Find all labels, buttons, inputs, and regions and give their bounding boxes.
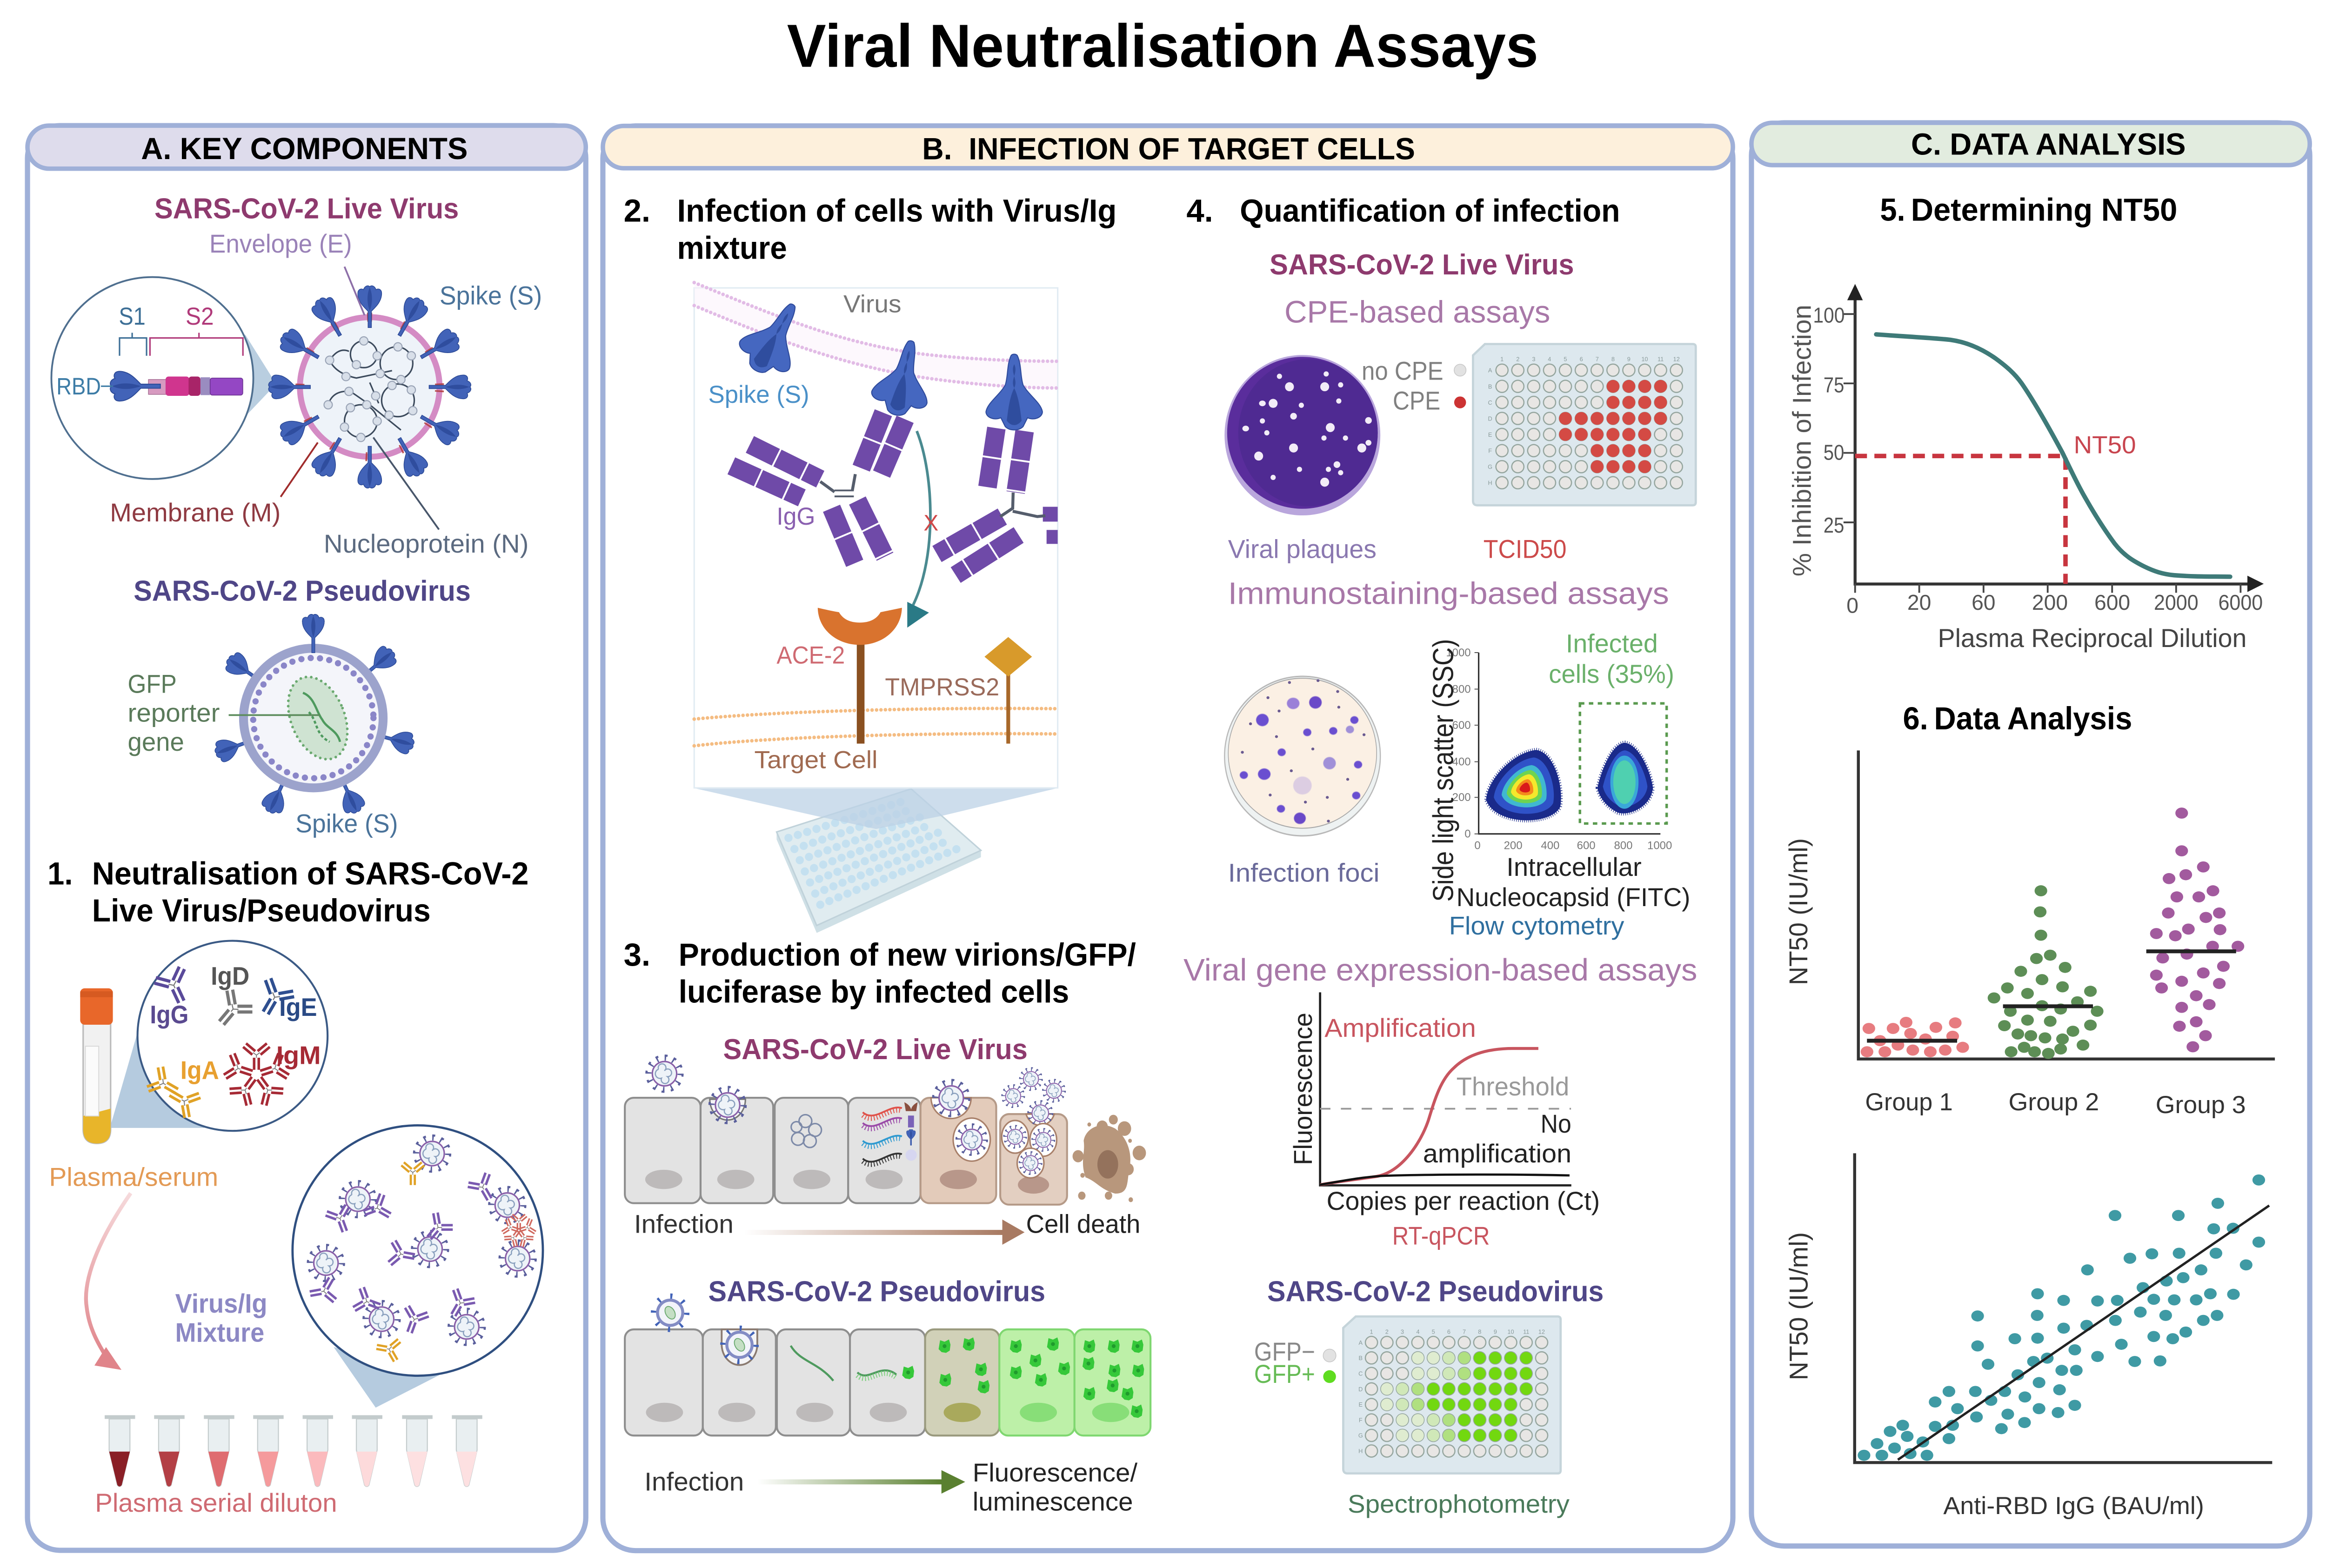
chart: neutralisation curve: 0 bbox=[1846, 593, 1858, 617]
diagram: live virus structure bbox=[51, 267, 471, 529]
TMPRSS2 bbox=[984, 637, 1032, 744]
icon: TCID50 plate: 10 bbox=[1641, 356, 1648, 363]
icon: TCID50 plate: 7 bbox=[1596, 356, 1599, 363]
chart: RT-qPCR amplification: No bbox=[1541, 1109, 1571, 1138]
chart: flow cytometry: 600 bbox=[1577, 839, 1596, 852]
heading: step 6: Data Analysis bbox=[1934, 701, 2132, 736]
arrow: infection to cell death bbox=[744, 1220, 1024, 1245]
callout cone bbox=[694, 788, 1057, 829]
chart: flow cytometry: 800 bbox=[1614, 839, 1632, 852]
label: GFP reporter gene: reporter bbox=[128, 698, 220, 727]
icon: TCID50 plate: B bbox=[1488, 383, 1492, 390]
icon: GFP plate: G bbox=[1358, 1432, 1363, 1439]
heading: step 2: 2. bbox=[624, 193, 650, 229]
panel C: data analysis bbox=[1751, 123, 2310, 1546]
icon: TCID50 plate: H bbox=[1488, 480, 1492, 487]
heading: step 5: 5. bbox=[1880, 192, 1905, 228]
cell membrane bbox=[694, 708, 1057, 746]
icon: TCID50 plate: E bbox=[1488, 431, 1492, 438]
dots: group 2 bbox=[1988, 885, 2104, 1059]
label: TCID50: TCID50 bbox=[1484, 534, 1567, 564]
uncoated RNA bbox=[791, 1114, 822, 1148]
panel B header bbox=[603, 126, 1733, 168]
icon: TCID50 plate: 3 bbox=[1532, 356, 1536, 363]
chart: NT50 vs anti-RBD IgG scatter: Anti-RBD IgG (BAU/ml) bbox=[1943, 1492, 2204, 1520]
virions entering bbox=[646, 1055, 682, 1092]
legend: GFP: GFP− bbox=[1254, 1337, 1315, 1366]
chart: flow cytometry: 200 bbox=[1504, 839, 1523, 852]
heading: step 1: Neutralisation of SARS-CoV-2 bbox=[92, 855, 528, 891]
label: viral plaques: Viral plaques bbox=[1228, 534, 1377, 564]
chart: neutralisation curve bbox=[1787, 284, 2264, 653]
chart: NT50 by group bbox=[1784, 750, 2275, 1119]
cell row: pseudovirus infection bbox=[625, 1296, 1150, 1435]
chart: flow cytometry bbox=[1427, 628, 1690, 912]
panel B header: B. INFECTION OF TARGET CELLS bbox=[922, 132, 1415, 166]
icon: GFP plate: 5 bbox=[1432, 1328, 1435, 1335]
virus membrane bbox=[694, 282, 1057, 388]
diagram: spike/antibody/ACE-2 interaction: IgG bbox=[776, 503, 815, 530]
label: spectrophotometry: Spectrophotometry bbox=[1348, 1490, 1570, 1518]
diagram: live virus structure: RBD bbox=[56, 373, 101, 400]
chart: RT-qPCR amplification bbox=[1288, 992, 1600, 1215]
heading: step 4: 4. bbox=[1186, 193, 1213, 229]
panel C header bbox=[1751, 123, 2310, 165]
heading: step 2: Infection of cells with Virus/Ig bbox=[677, 193, 1116, 229]
chart: flow cytometry: 600 bbox=[1452, 719, 1471, 732]
callout: plasma tube to immunoglobulins: IgD bbox=[211, 962, 249, 990]
icon: 96-well plate under zoom bbox=[776, 789, 981, 933]
label: membrane: Membrane (M) bbox=[110, 498, 281, 527]
heading: step 3: luciferase by infected cells bbox=[679, 974, 1069, 1010]
diagram: spike/antibody/ACE-2 interaction: TMPRSS2 bbox=[885, 674, 999, 701]
heading: step 4: Quantification of infection bbox=[1240, 193, 1620, 229]
icon: TCID50 plate: 8 bbox=[1611, 356, 1615, 363]
chart: neutralisation curve: 20 bbox=[1907, 590, 1931, 614]
icon: GFP plate: 10 bbox=[1507, 1328, 1514, 1335]
viral RNA and proteins bbox=[863, 1108, 902, 1165]
panel B: infection of target cells bbox=[603, 126, 1733, 1551]
chart: neutralisation curve: 50 bbox=[1824, 440, 1844, 465]
heading: step 6: 6. bbox=[1903, 701, 1928, 736]
chart: RT-qPCR amplification: Amplification bbox=[1324, 1013, 1476, 1042]
label: nucleoprotein: Nucleoprotein (N) bbox=[324, 529, 528, 558]
heading: pseudovirus (step 4): SARS-CoV-2 Pseudovirus bbox=[1267, 1275, 1604, 1308]
antibody 1 bbox=[731, 412, 906, 565]
dots: group 1 bbox=[1861, 1017, 1969, 1057]
label: fluorescence/luminescence: Fluorescence/ bbox=[973, 1458, 1138, 1487]
icon: TCID50 plate: D bbox=[1488, 415, 1492, 422]
chart: neutralisation curve: 600 bbox=[2094, 590, 2130, 614]
diagram: spike/antibody/ACE-2 interaction: Spike (S) bbox=[708, 381, 809, 408]
label: virus/Ig mixture: Virus/Ig bbox=[175, 1289, 267, 1319]
chart: NT50 vs anti-RBD IgG scatter: NT50 (IU/ml) bbox=[1784, 1232, 1813, 1381]
icon: TCID50 plate: A bbox=[1488, 367, 1492, 374]
chart: neutralisation curve: 100 bbox=[1813, 303, 1845, 327]
title: Viral Neutralisation Assays bbox=[787, 12, 1538, 80]
diagram: spike/antibody/ACE-2 interaction bbox=[694, 282, 1058, 788]
icon: TCID50 plate: 2 bbox=[1516, 356, 1519, 363]
callout: virus/Ig mixture bbox=[293, 1125, 543, 1408]
chart: RT-qPCR amplification: amplification bbox=[1423, 1139, 1571, 1168]
icon: TCID50 plate: 6 bbox=[1580, 356, 1583, 363]
chart: neutralisation curve: Plasma Reciprocal Dilution bbox=[1938, 623, 2246, 653]
icon: TCID50 plate: 4 bbox=[1548, 356, 1551, 363]
arrow: infection to fluorescence bbox=[757, 1470, 965, 1494]
heading: step 3: Production of new virions/GFP/ bbox=[679, 937, 1136, 973]
callout: plasma tube to immunoglobulins bbox=[80, 941, 328, 1143]
chart: flow cytometry: Intracellular bbox=[1506, 852, 1642, 881]
chart: neutralisation curve: 60 bbox=[1972, 590, 1996, 614]
label: GFP reporter gene: gene bbox=[128, 727, 184, 756]
icon: pseudovirus bbox=[212, 614, 416, 817]
label: infection (pseudovirus): Infection bbox=[644, 1467, 744, 1496]
icon: GFP plate: 8 bbox=[1478, 1328, 1481, 1335]
heading: live virus (step 3): SARS-CoV-2 Live Virus bbox=[723, 1034, 1028, 1066]
icon: infection foci dish bbox=[1224, 676, 1380, 836]
callout: plasma tube to immunoglobulins: IgM bbox=[276, 1042, 321, 1070]
icon: GFP plate: C bbox=[1358, 1370, 1363, 1377]
legend: CPE: no CPE bbox=[1362, 356, 1444, 386]
legend: CPE: CPE bbox=[1393, 386, 1440, 415]
legend: GFP: GFP+ bbox=[1254, 1359, 1315, 1388]
icon: SARS-CoV-2 virion bbox=[268, 286, 471, 488]
heading: step 1: 1. bbox=[47, 855, 73, 891]
icon: TCID50 plate: 12 bbox=[1673, 356, 1680, 363]
label: virus/Ig mixture: Mixture bbox=[175, 1318, 264, 1348]
label: pseudovirus spike: Spike (S) bbox=[295, 809, 398, 838]
icon: TCID50 plate: 1 bbox=[1500, 356, 1504, 363]
chart: RT-qPCR amplification: Copies per reaction (Ct) bbox=[1327, 1186, 1600, 1215]
chart: neutralisation curve: 200 bbox=[2032, 590, 2068, 614]
arrow: blocked entry bbox=[907, 431, 938, 627]
antibody 2 bbox=[937, 428, 1024, 575]
heading: step 3 bbox=[624, 937, 1136, 1010]
cell row: live virus infection bbox=[625, 1055, 1146, 1205]
heading: step 2 bbox=[624, 193, 1116, 266]
chart: neutralisation curve: 2000 bbox=[2154, 590, 2199, 614]
legend: GFP bbox=[1254, 1337, 1336, 1388]
chart: neutralisation curve: 6000 bbox=[2218, 590, 2263, 614]
diagram: spike/antibody/ACE-2 interaction: Virus bbox=[843, 290, 902, 318]
label: infection foci: Infection foci bbox=[1228, 858, 1379, 887]
icon: TCID50 plate bbox=[1473, 344, 1696, 505]
chart: neutralisation curve: 75 bbox=[1824, 373, 1844, 397]
icon: TCID50 plate: 5 bbox=[1564, 356, 1567, 363]
panel A: key components bbox=[27, 126, 586, 1550]
panel A header bbox=[27, 126, 586, 169]
chart: flow cytometry: 200 bbox=[1452, 791, 1471, 804]
chart: NT50 by group: NT50 (IU/ml) bbox=[1784, 838, 1813, 985]
scatter points bbox=[1858, 1174, 2265, 1461]
chart: RT-qPCR amplification: Threshold bbox=[1457, 1072, 1569, 1101]
chart: flow cytometry: Infected bbox=[1566, 628, 1658, 658]
spikes bbox=[731, 291, 818, 384]
icon: serial dilution tubes bbox=[105, 1415, 482, 1487]
callout: plasma tube to immunoglobulins: IgE bbox=[279, 994, 317, 1021]
bracket S1 bbox=[120, 333, 147, 356]
heading: CPE-based assays: CPE-based assays bbox=[1284, 295, 1550, 330]
budding and vesicle virions bbox=[931, 1098, 971, 1119]
chart: flow cytometry: 400 bbox=[1452, 756, 1471, 768]
chart: NT50 by group: Group 3 bbox=[2156, 1091, 2246, 1119]
dots: group 3 bbox=[2150, 807, 2244, 1052]
label: flow cytometry: Flow cytometry bbox=[1449, 912, 1624, 940]
icon: GFP plate: 7 bbox=[1463, 1328, 1466, 1335]
label: cell death: Cell death bbox=[1026, 1209, 1140, 1239]
chart: flow cytometry: 1000 bbox=[1647, 839, 1672, 852]
ACE-2 receptor bbox=[818, 608, 902, 744]
heading: live virus: SARS-CoV-2 Live Virus bbox=[154, 193, 459, 225]
arrow: blocked entry: X bbox=[923, 511, 938, 536]
label: virus/Ig mixture bbox=[175, 1289, 267, 1348]
heading: step 5: Determining NT50 bbox=[1911, 192, 2177, 228]
reporter RNA strands bbox=[791, 1346, 896, 1381]
arrow: plasma to tubes bbox=[86, 1193, 131, 1370]
heading: pseudovirus (step 3): SARS-CoV-2 Pseudovirus bbox=[708, 1275, 1045, 1308]
chart: neutralisation curve: % Inhibition of Infection bbox=[1787, 305, 1817, 576]
GFP proteins bbox=[902, 1337, 1144, 1418]
icon: TCID50 plate: G bbox=[1488, 463, 1492, 470]
bracket S2 bbox=[150, 333, 243, 356]
chart: RT-qPCR amplification: Fluorescence bbox=[1288, 1013, 1317, 1165]
heading: step 1: Live Virus/Pseudovirus bbox=[92, 893, 431, 928]
chart: flow cytometry: 1000 bbox=[1446, 647, 1471, 659]
chart: flow cytometry: Side light scatter (SSC) bbox=[1427, 639, 1459, 902]
icon: GFP plate: H bbox=[1358, 1448, 1363, 1455]
icon: GFP plate: 4 bbox=[1416, 1328, 1420, 1335]
diagram: spike/antibody/ACE-2 interaction: Target Cell bbox=[755, 746, 877, 774]
icon: TCID50 plate: C bbox=[1488, 399, 1492, 406]
label: spike: Spike (S) bbox=[440, 281, 542, 310]
diagram: live virus structure: S1 bbox=[119, 303, 146, 330]
chart: NT50 vs anti-RBD IgG scatter bbox=[1784, 1153, 2272, 1520]
panel C header: C. DATA ANALYSIS bbox=[1911, 127, 2186, 161]
icon: viral plaque dish bbox=[1224, 355, 1380, 515]
callout: plasma tube to immunoglobulins: IgA bbox=[180, 1056, 219, 1084]
dying cell bbox=[1073, 1115, 1146, 1202]
icon: GFP plate: 3 bbox=[1401, 1328, 1404, 1335]
label: fluorescence/luminescence bbox=[973, 1458, 1138, 1516]
chart: flow cytometry: 800 bbox=[1452, 683, 1471, 695]
legend: CPE bbox=[1362, 356, 1466, 415]
chart: flow cytometry: 0 bbox=[1474, 839, 1481, 852]
icon: GFP plate: 1 bbox=[1370, 1328, 1373, 1335]
icon: TCID50 plate: 9 bbox=[1627, 356, 1631, 363]
icon: GFP plate: A bbox=[1359, 1339, 1363, 1346]
icon: GFP plate bbox=[1343, 1316, 1561, 1474]
chart: NT50 by group: Group 2 bbox=[2008, 1088, 2099, 1116]
label: infection (live): Infection bbox=[634, 1209, 734, 1239]
chart: neutralisation curve: 25 bbox=[1824, 513, 1844, 537]
diagram: spike/antibody/ACE-2 interaction: ACE-2 bbox=[776, 641, 845, 669]
heading: live virus (step 4): SARS-CoV-2 Live Virus bbox=[1270, 249, 1574, 281]
spike domain chain bbox=[110, 371, 243, 401]
panel A header: A. KEY COMPONENTS bbox=[141, 132, 468, 166]
icon: GFP plate: 6 bbox=[1447, 1328, 1450, 1335]
density blob: uninfected cells bbox=[1486, 743, 1653, 821]
chart: flow cytometry: cells (35%) bbox=[1549, 659, 1674, 688]
heading: immunostaining-based assays: Immunostaining-based assays bbox=[1228, 576, 1669, 611]
icon: GFP plate: 9 bbox=[1494, 1328, 1497, 1335]
heading: step 2: mixture bbox=[677, 230, 787, 266]
density blob: infected cells bbox=[1597, 743, 1653, 814]
chart: NT50 by group: Group 1 bbox=[1865, 1088, 1953, 1116]
icon: TCID50 plate: F bbox=[1488, 447, 1492, 454]
heading: pseudovirus: SARS-CoV-2 Pseudovirus bbox=[134, 575, 471, 607]
label: GFP reporter gene: GFP bbox=[128, 669, 177, 698]
diagram: live virus structure: S2 bbox=[186, 303, 214, 330]
chart: flow cytometry: Nucleocapsid (FITC) bbox=[1457, 882, 1690, 912]
callout: plasma tube to immunoglobulins: IgG bbox=[150, 1001, 188, 1029]
pseudovirions bbox=[654, 1296, 687, 1329]
label: GFP reporter gene bbox=[128, 669, 220, 756]
icon: TCID50 plate: 11 bbox=[1658, 356, 1664, 363]
icon: GFP plate: 2 bbox=[1385, 1328, 1389, 1335]
icon: GFP plate: D bbox=[1358, 1386, 1363, 1393]
icon: GFP plate: B bbox=[1359, 1354, 1363, 1361]
chart: neutralisation curve: NT50 bbox=[2074, 431, 2136, 459]
label: envelope: Envelope (E) bbox=[209, 229, 352, 258]
chart: flow cytometry: 400 bbox=[1541, 839, 1559, 852]
chart: flow cytometry: 0 bbox=[1464, 828, 1471, 841]
icon: GFP plate: F bbox=[1359, 1417, 1363, 1424]
heading: step 3: 3. bbox=[624, 937, 650, 973]
heading: step 1 bbox=[47, 855, 528, 928]
label: fluorescence/luminescence: luminescence bbox=[973, 1487, 1133, 1516]
icon: GFP plate: 11 bbox=[1523, 1328, 1529, 1335]
icon: GFP plate: 12 bbox=[1538, 1328, 1545, 1335]
heading: viral gene expression-based assays: Viral gene expression-based assays bbox=[1183, 953, 1697, 988]
icon: GFP plate: E bbox=[1359, 1401, 1363, 1408]
label: plasma/serum: Plasma/serum bbox=[49, 1162, 218, 1191]
label: RT-qPCR: RT-qPCR bbox=[1392, 1222, 1490, 1250]
icon: blood tube bbox=[80, 988, 113, 1143]
label: plasma serial dilution: Plasma serial diluton bbox=[95, 1488, 337, 1517]
